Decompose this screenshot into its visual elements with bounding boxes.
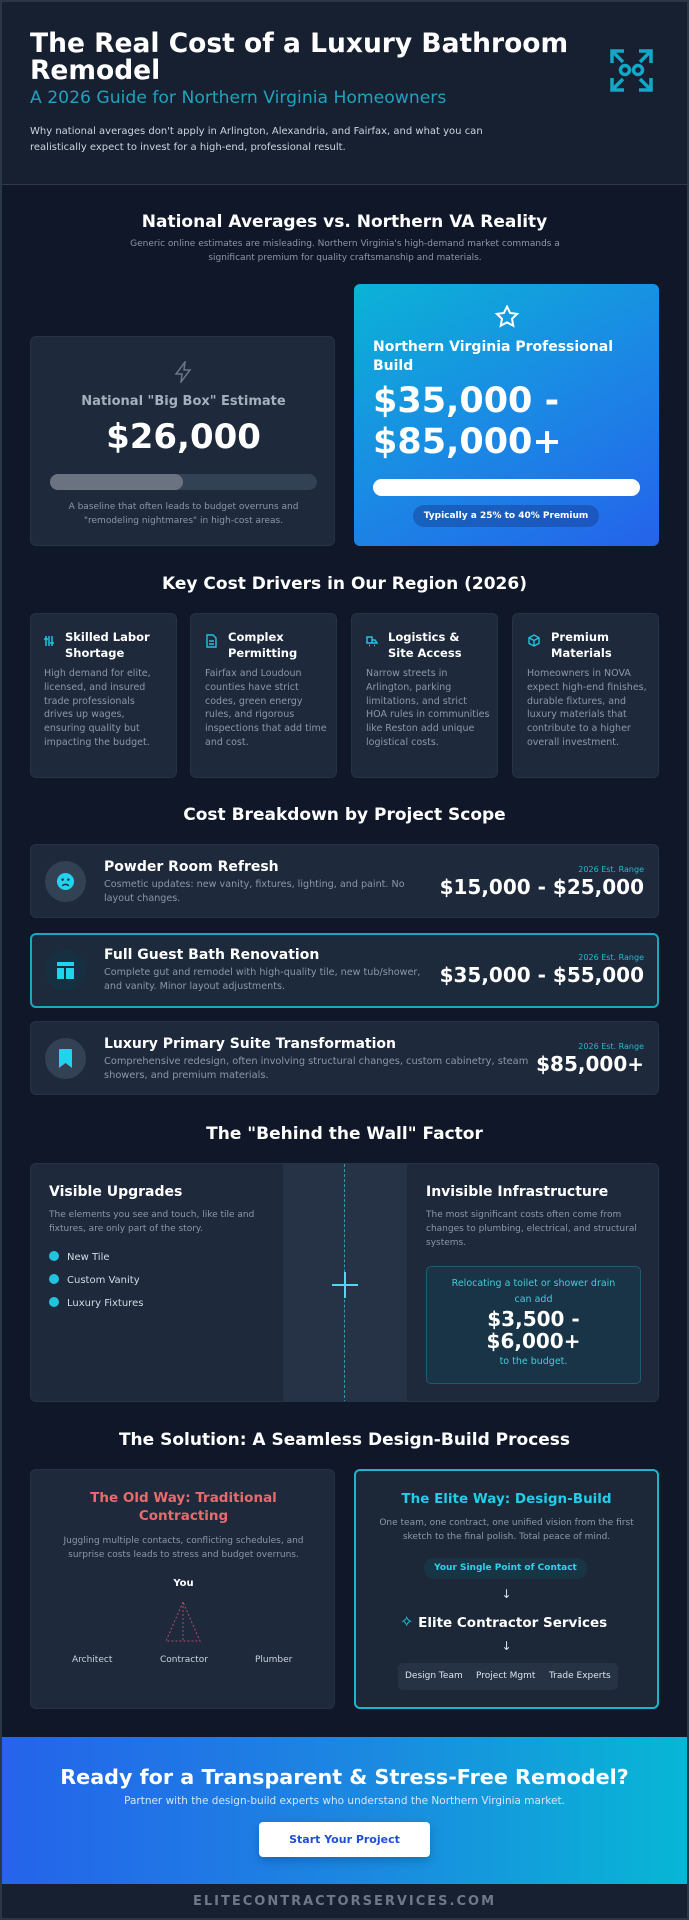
section title: cost drivers: Key Cost Drivers in Our Region (2026) — [162, 574, 527, 594]
section intro: Generic online estimates are misleading. Northern Virginia's high-demand market commands a significant premium for quality craftsmanship and materials. — [130, 239, 560, 263]
title: Logistics & — [388, 630, 459, 644]
button — [259, 1822, 430, 1857]
row: full guest bath — [30, 933, 659, 1008]
invisible infrastructure — [426, 1184, 637, 1248]
diagram: You — [173, 1578, 194, 1589]
desc: Complete gut and remodel with high-quality tile, new tub/shower, and vanity. Minor layout adjustments. — [104, 967, 420, 992]
footer: ELITECONTRACTORSERVICES.COM — [193, 1894, 496, 1909]
wall strip — [283, 1164, 407, 1403]
callout: relocation cost: $3,500 - — [487, 1307, 580, 1331]
icon: lightning — [174, 361, 192, 383]
invisible infrastructure: Invisible Infrastructure — [426, 1184, 608, 1200]
price: $35,000 - $55,000 — [440, 963, 644, 987]
button: Start Your Project — [289, 1833, 400, 1846]
panel: NOVA professional build — [354, 284, 659, 546]
price: $15,000 - $25,000 — [440, 875, 644, 899]
section title: solution: The Solution: A Seamless Design-Build Process — [119, 1430, 570, 1450]
checklist: New Tile — [67, 1252, 110, 1263]
icon: bookmark — [45, 1038, 86, 1079]
diagram — [72, 1578, 292, 1665]
icon: expand arrows — [610, 49, 653, 92]
row: powder room — [30, 844, 659, 918]
bar — [50, 474, 317, 490]
diagram: Contractor — [160, 1655, 208, 1665]
visible upgrades — [49, 1184, 254, 1309]
icon: document — [206, 634, 217, 648]
pill: single point — [424, 1558, 587, 1579]
card title: National "Big Box" Estimate — [81, 394, 286, 409]
icon: face — [45, 861, 86, 902]
icon: cube — [528, 634, 540, 647]
team chips: Design Team — [405, 1671, 463, 1681]
team chips: Project Mgmt — [476, 1671, 535, 1681]
title — [228, 630, 297, 660]
visible upgrades: Visible Upgrades — [49, 1184, 182, 1200]
title: Materials — [551, 646, 612, 660]
price: $35,000 - $85,000+ — [373, 381, 562, 462]
price: $26,000 — [106, 417, 261, 457]
desc: Cosmetic updates: new vanity, fixtures, lighting, and paint. No layout changes. — [104, 879, 405, 904]
title: The Real Cost of a Luxury Bathroom Remodel — [30, 28, 568, 86]
label: 2026 Est. Range — [578, 953, 644, 962]
title: Powder Room Refresh — [104, 859, 279, 875]
icon: truck — [366, 636, 378, 646]
checklist: Luxury Fixtures — [67, 1298, 143, 1309]
premium pill — [413, 505, 599, 527]
checklist: Custom Vanity — [67, 1275, 140, 1286]
title: The Old Way: Traditional — [90, 1490, 277, 1506]
label: 2026 Est. Range — [578, 865, 644, 874]
invisible infrastructure: The most significant costs often come from changes to plumbing, electrical, and structural systems. — [426, 1210, 637, 1248]
diagram: Plumber — [255, 1655, 292, 1665]
pill: single point: Your Single Point of Contact — [434, 1563, 577, 1573]
footer — [0, 1884, 689, 1920]
checklist — [49, 1251, 143, 1309]
panel: old way — [30, 1469, 335, 1709]
text: Homeowners in NOVA expect high-end finishes, durable fixtures, and luxury materials that contribute to a higher overall investment. — [527, 668, 647, 748]
panel: elite way — [354, 1469, 659, 1709]
callout: relocation cost: $6,000+ — [487, 1329, 580, 1353]
title: Premium — [551, 630, 609, 644]
panel: premium materials — [512, 613, 659, 778]
row: luxury primary suite — [30, 1021, 659, 1095]
panel: skilled labor — [30, 613, 177, 778]
callout: relocation cost: Relocating a toilet or shower drain — [452, 1278, 615, 1289]
CTA text: Partner with the design-build experts who understand the Northern Virginia market. — [124, 1795, 565, 1807]
icon: tools — [44, 636, 54, 646]
callout: relocation cost: can add — [515, 1294, 552, 1305]
title: Permitting — [228, 646, 297, 660]
team chips — [398, 1663, 618, 1690]
label: 2026 Est. Range — [578, 1042, 644, 1051]
header — [0, 0, 689, 185]
title — [388, 630, 462, 660]
title — [551, 630, 612, 660]
desc: Juggling multiple contacts, conflicting schedules, and surprise costs leads to stress and budget overruns. — [63, 1536, 304, 1560]
price: $85,000+ — [536, 1052, 644, 1076]
visible upgrades: The elements you see and touch, like tile and fixtures, are only part of the story. — [49, 1210, 254, 1234]
note: A baseline that often leads to budget overruns and "remodeling nightmares" in high-cost areas. — [69, 502, 298, 526]
icon: star — [495, 305, 519, 328]
team chips: Trade Experts — [549, 1671, 611, 1681]
brand: ✧ Elite Contractor Services — [400, 1612, 607, 1631]
icon: plus — [332, 1272, 358, 1298]
card title: Northern Virginia Professional Build — [373, 339, 613, 374]
title: Luxury Primary Suite Transformation — [104, 1036, 396, 1052]
callout: relocation cost: to the budget. — [500, 1356, 567, 1367]
diagram: Architect — [72, 1655, 112, 1665]
title: Shortage — [65, 646, 124, 660]
title: Full Guest Bath Renovation — [104, 947, 319, 963]
text: Fairfax and Loudoun counties have strict codes, green energy rules, and rigorous inspections that add time and cost. — [205, 668, 327, 748]
title: Complex — [228, 630, 284, 644]
panel: permitting — [190, 613, 337, 778]
title: Skilled Labor — [65, 630, 150, 644]
title — [65, 630, 150, 660]
callout: relocation cost — [426, 1266, 641, 1384]
CTA banner — [0, 1737, 689, 1884]
title — [90, 1490, 277, 1524]
text: High demand for elite, licensed, and insured trade professionals drives up wages, ensuring quality but impacting the budget. — [44, 668, 151, 748]
premium pill: Typically a 25% to 40% Premium — [424, 511, 588, 521]
title: Contracting — [139, 1508, 228, 1524]
section title: national vs NOVA: National Averages vs. Northern VA Reality — [142, 212, 547, 232]
panel: behind the wall — [30, 1163, 659, 1402]
title: Site Access — [388, 646, 462, 660]
panel: national estimate — [30, 336, 335, 546]
subtitle: A 2026 Guide for Northern Virginia Homeowners — [30, 88, 446, 108]
CTA title: Ready for a Transparent & Stress-Free Remodel? — [60, 1765, 629, 1789]
icon: layout — [45, 950, 86, 991]
arrow: ↓ — [501, 1639, 512, 1653]
title: The Elite Way: Design-Build — [401, 1491, 612, 1507]
panel: logistics — [351, 613, 498, 778]
section title: behind the wall: The "Behind the Wall" Factor — [206, 1124, 483, 1144]
bar — [373, 479, 640, 496]
text: Narrow streets in Arlington, parking limitations, and strict HOA rules in communities like Reston add unique logistical costs. — [366, 668, 489, 748]
desc: One team, one contract, one unified vision from the first sketch to the final polish. Total peace of mind. — [379, 1518, 634, 1542]
intro text: Why national averages don't apply in Arlington, Alexandria, and Fairfax, and what you can realistically expect to invest for a high-end, professional result. — [30, 126, 483, 153]
desc: Comprehensive redesign, often involving structural changes, custom cabinetry, steam showers, and premium materials. — [104, 1056, 528, 1081]
section title: breakdown: Cost Breakdown by Project Scope — [183, 805, 506, 825]
arrow: ↓ — [501, 1587, 512, 1601]
